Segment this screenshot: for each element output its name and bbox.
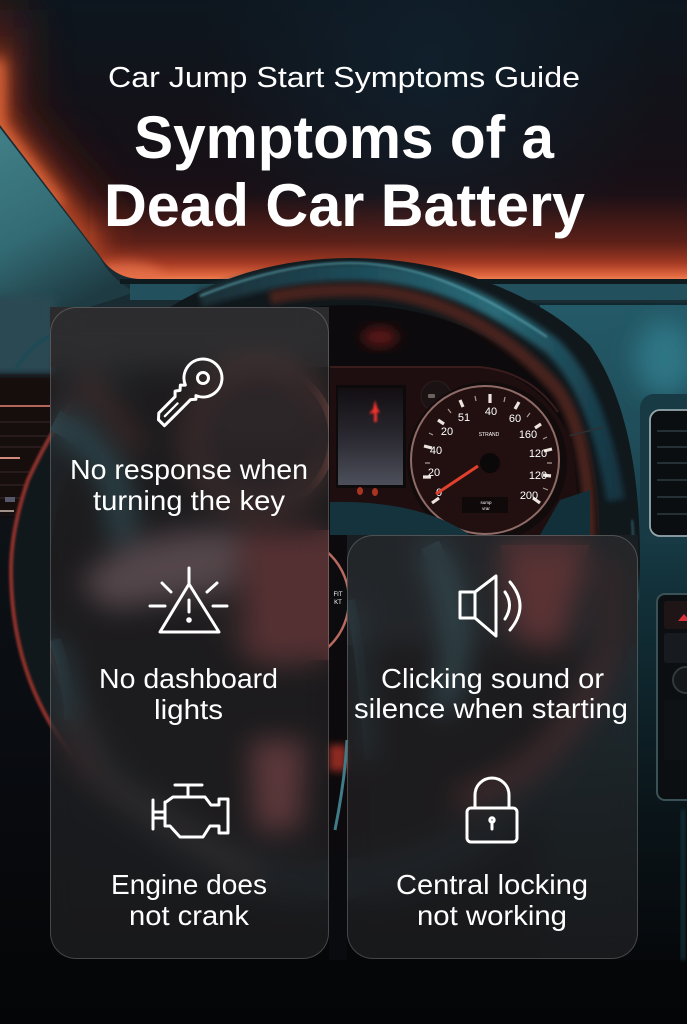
symptom: engine does not crank: Engine does (111, 869, 267, 900)
speedometer gauge: 60 (509, 413, 521, 425)
wheel hub (330, 502, 470, 535)
panel: left symptoms (50, 307, 329, 959)
symptom: no dashboard lights: lights (154, 694, 223, 725)
symptom: clicking sound: Clicking sound or (381, 663, 604, 694)
speedometer gauge: 40 (485, 406, 497, 418)
right centre console (657, 594, 687, 800)
title: Dead Car Battery (104, 172, 586, 239)
speedometer gauge: 0 (436, 487, 442, 499)
symptom: no dashboard lights (99, 663, 278, 725)
right air vent (640, 394, 687, 544)
symptom: engine does not crank: not crank (129, 900, 249, 931)
speedometer gauge: 20 (441, 426, 453, 438)
symptom: no response: turning the key (93, 485, 285, 516)
icon: padlock (467, 778, 517, 842)
icon: speaker (460, 576, 520, 636)
cluster housing (330, 367, 578, 535)
symptom: clicking sound: silence when starting (354, 693, 628, 724)
speedometer gauge: 51 (458, 412, 470, 424)
speedometer gauge: vrar (482, 506, 490, 511)
speedometer gauge: sump (480, 500, 492, 505)
background: car interior photo scene: KT (334, 600, 342, 606)
steering wheel rim (11, 258, 640, 900)
symptom: central locking: Central locking (396, 869, 588, 900)
symptom: engine does not crank (111, 869, 267, 931)
speedometer gauge (407, 382, 567, 542)
icon: key (146, 351, 230, 435)
symptom: central locking: not working (417, 900, 567, 931)
header (104, 62, 586, 239)
left dash (0, 296, 55, 374)
icon: engine (153, 785, 228, 837)
info screen (336, 385, 406, 488)
right dash (540, 305, 687, 960)
speedometer gauge: 120 (529, 470, 547, 482)
icon: warning triangle (150, 568, 227, 632)
speedometer gauge: STRAND (479, 432, 500, 438)
symptom: no dashboard lights: No dashboard (99, 663, 278, 694)
blurred shapes behind left panel (50, 307, 332, 880)
symptom: clicking sound (354, 663, 628, 724)
blurred shapes behind right panel (347, 535, 638, 800)
speedometer gauge: 160 (519, 429, 537, 441)
title: Symptoms of a (134, 104, 555, 171)
symptom: central locking (396, 869, 588, 931)
speedometer gauge: 120 (529, 448, 547, 460)
panel: right symptoms (347, 535, 638, 959)
speedometer gauge: 200 (520, 490, 538, 502)
symptom: no response (70, 454, 308, 516)
speedometer gauge: 40 (430, 445, 442, 457)
upper dashboard (130, 280, 687, 300)
windshield with orange ambient glow (0, 0, 687, 294)
speedometer gauge: 20 (428, 467, 440, 479)
A-pillar (0, 128, 135, 340)
subtitle: Car Jump Start Symptoms Guide (108, 62, 580, 94)
left air vent (0, 376, 60, 516)
background: car interior photo scene: FIT (334, 592, 343, 598)
title (104, 104, 586, 239)
symptom: no response: No response when (70, 454, 308, 485)
